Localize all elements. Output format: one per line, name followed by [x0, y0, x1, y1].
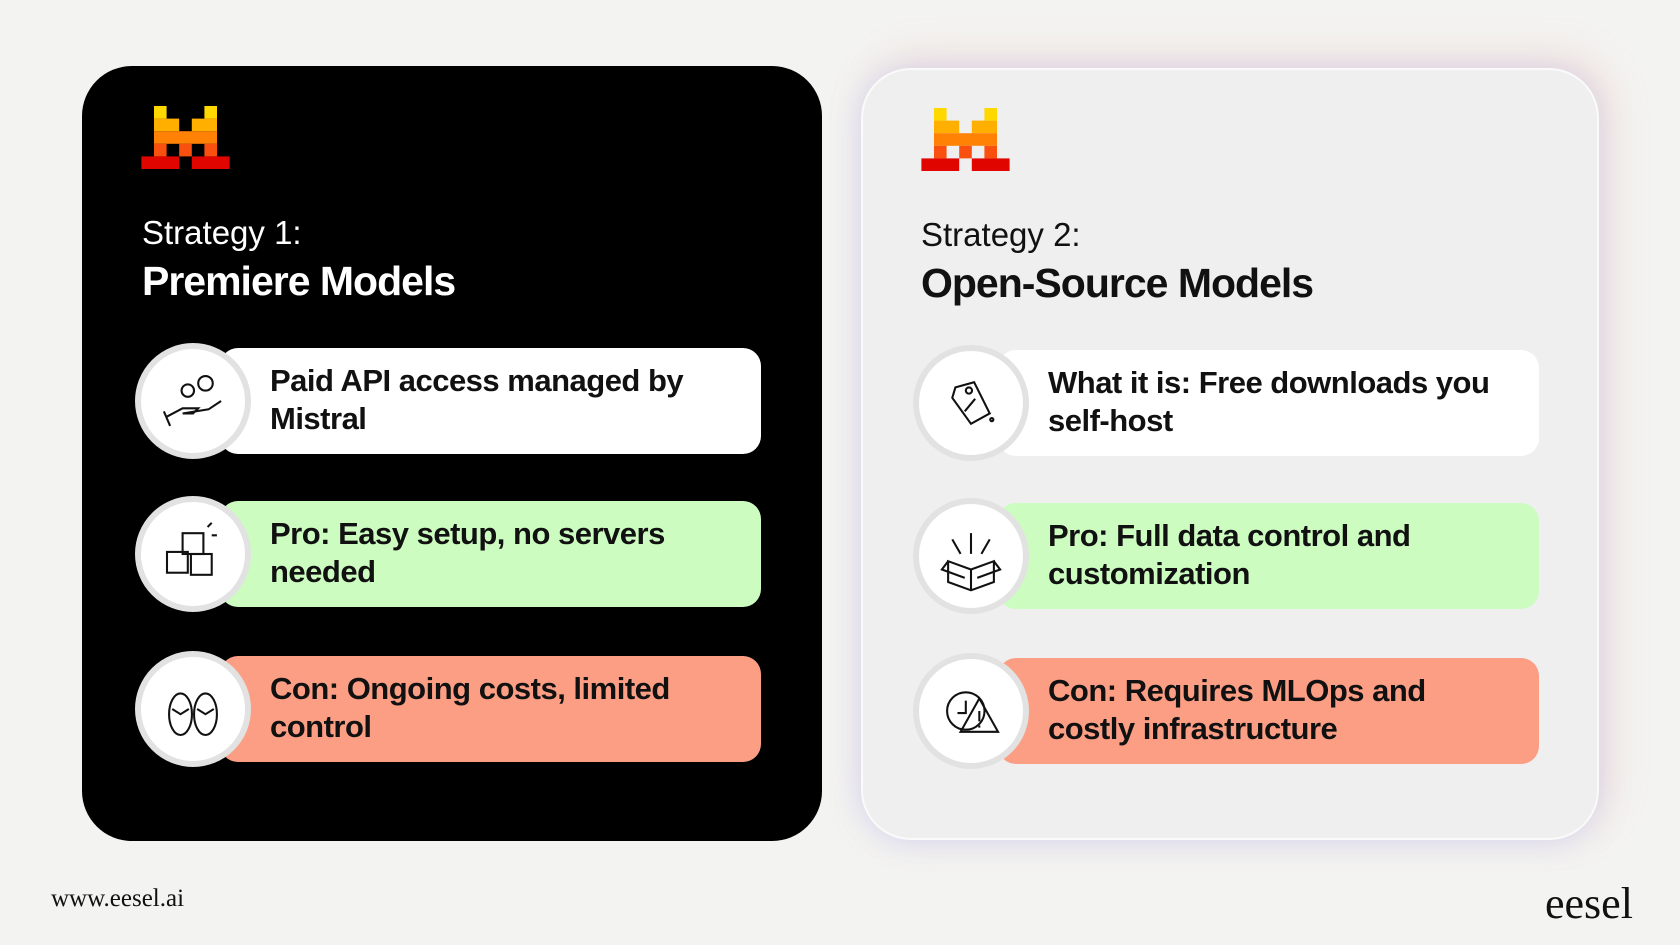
- logo: mistral: [921, 108, 1010, 171]
- row: pro: [135, 496, 761, 612]
- row: pro: customization: [1048, 556, 1250, 591]
- row: what it is: [913, 345, 1539, 461]
- row: pro: [913, 498, 1539, 614]
- icon: blocks: [135, 496, 251, 612]
- row: paid api: Mistral: [270, 401, 366, 436]
- footer: brand: eesel: [1545, 879, 1633, 928]
- icon: flip flops: [135, 651, 251, 767]
- logo: mistral: [141, 106, 230, 169]
- icon: price tag: [913, 345, 1029, 461]
- row: con: Con: Ongoing costs, limited: [270, 671, 670, 706]
- footer: url: www.eesel.ai: [51, 885, 184, 912]
- row: paid api: Paid API access managed by: [270, 363, 683, 398]
- row: con: costly infrastructure: [1048, 711, 1337, 746]
- row: paid api: [135, 343, 761, 459]
- title: Premiere Models: [142, 258, 455, 304]
- row: con: [913, 653, 1539, 769]
- row: con: [135, 651, 761, 767]
- row: what it is: What it is: Free downloads you: [1048, 365, 1489, 400]
- row: pro: Pro: Full data control and: [1048, 518, 1410, 553]
- icon: open box: [913, 498, 1029, 614]
- panel: strategy 1: [82, 66, 822, 841]
- subtitle: Strategy 2:: [921, 216, 1081, 253]
- row: con: Con: Requires MLOps and: [1048, 673, 1426, 708]
- icon: clock warning: [913, 653, 1029, 769]
- panel: strategy 2: [861, 68, 1599, 840]
- row: pro: needed: [270, 554, 376, 589]
- row: con: control: [270, 709, 372, 744]
- title: Open-Source Models: [921, 260, 1313, 306]
- row: what it is: self-host: [1048, 403, 1173, 438]
- row: pro: Pro: Easy setup, no servers: [270, 516, 665, 551]
- subtitle: Strategy 1:: [142, 214, 302, 251]
- icon: hand with coins: [135, 343, 251, 459]
